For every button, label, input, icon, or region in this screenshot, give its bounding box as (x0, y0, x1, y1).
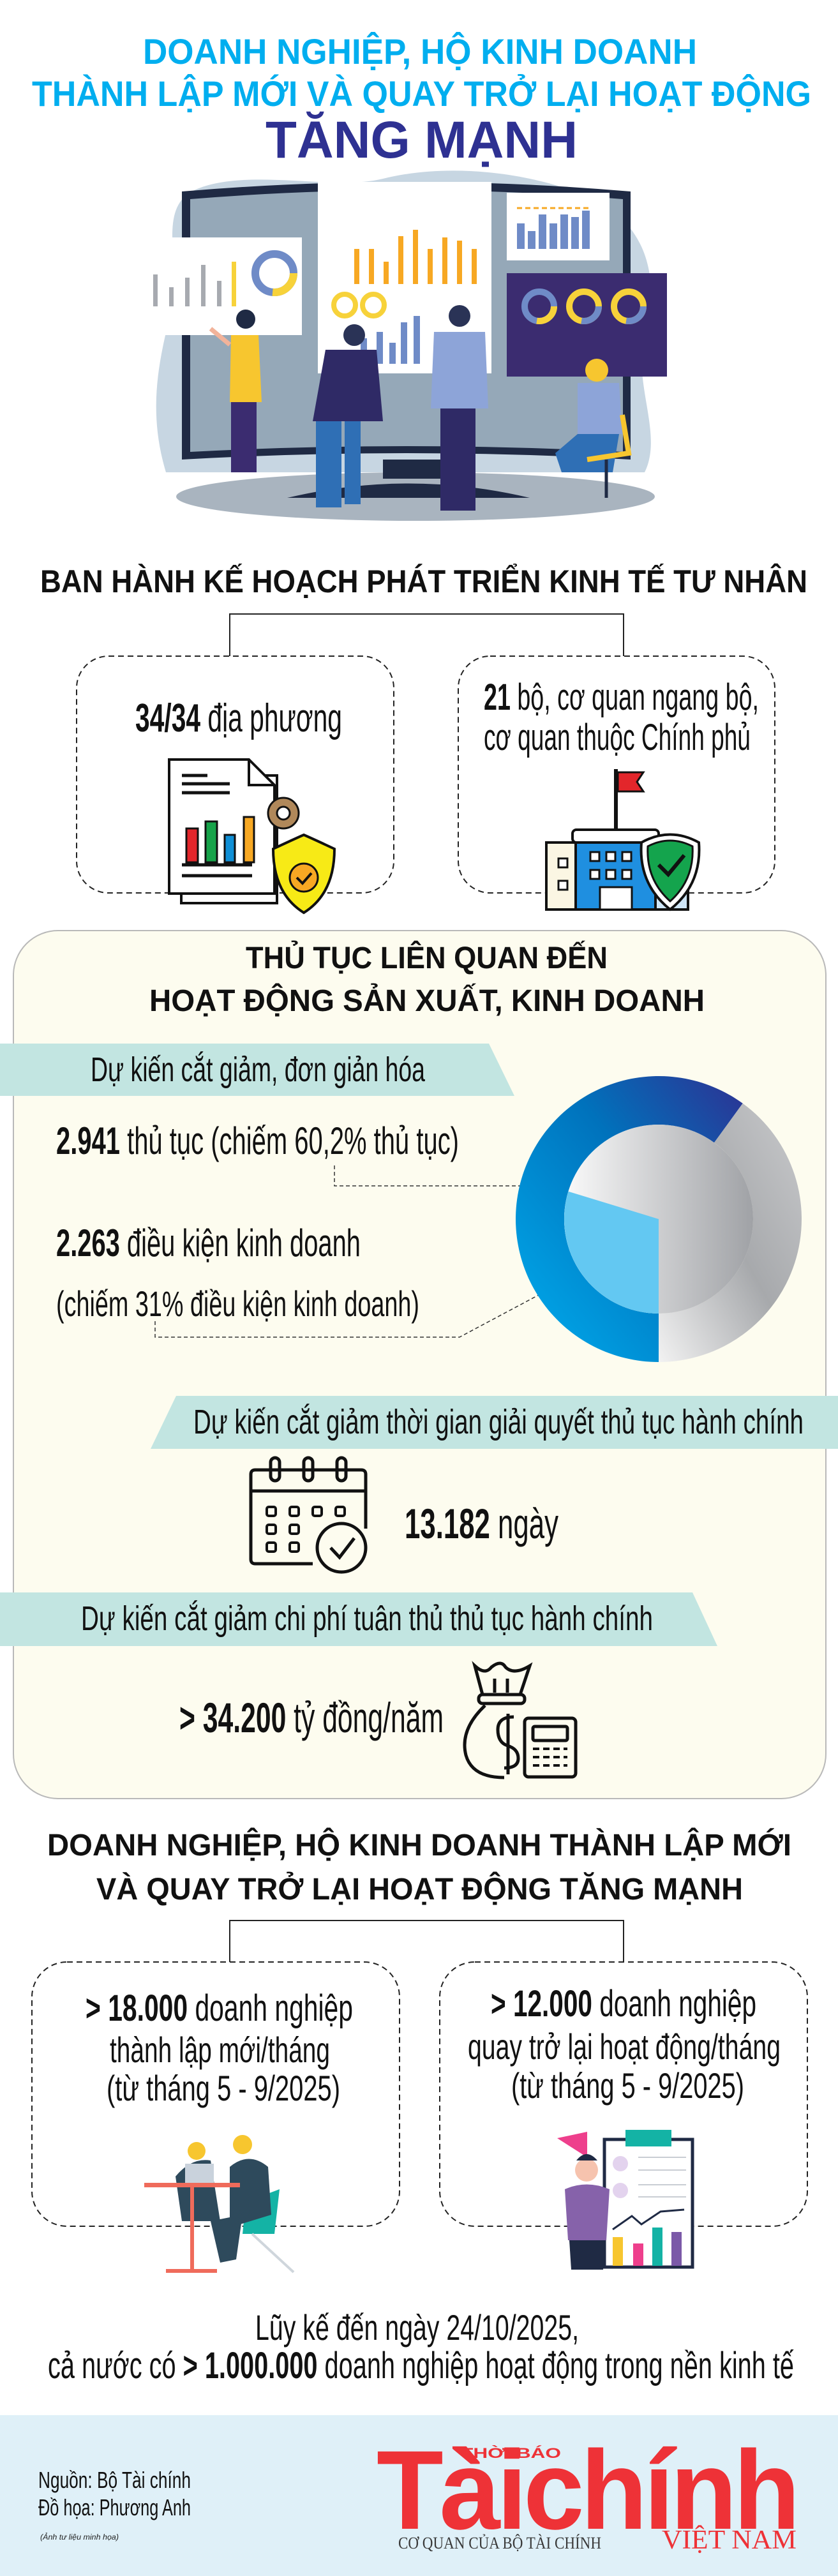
icon: man with clipboard chart (557, 2130, 692, 2270)
stat: 2.941 thủ tục: 2.941 thủ tục (chiếm 60,2% thủ tục) (56, 1120, 459, 1162)
section heading: doanh nghiệp thành lập mới: VÀ QUAY TRỞ LẠI HOẠT ĐỘNG TĂNG MẠNH (96, 1871, 743, 1906)
left panel (144, 237, 302, 335)
stat: 34.200 tỷ đồng: > 34.200 tỷ đồng/năm (179, 1694, 444, 1741)
people (211, 310, 262, 472)
icon: government building with shield (546, 769, 699, 910)
center chart panel (318, 182, 491, 373)
title: DOANH NGHIỆP, HỘ KINH DOANH (143, 31, 697, 71)
logo: Thời báo Tài chính Việt Nam: Tàichính (377, 2428, 797, 2553)
arrow: to outer ring (334, 1165, 528, 1186)
top right panel (507, 193, 610, 260)
source credits (38, 2467, 191, 2542)
icon: money bag and calculator (465, 1663, 576, 1778)
stat: 13.182 ngày: 13.182 ngày (405, 1500, 558, 1547)
logo: Thời báo Tài chính Việt Nam: THỜI BÁO (461, 2445, 561, 2461)
icon: calendar (251, 1458, 366, 1572)
donut chart (516, 1076, 802, 1362)
band: chi phí (0, 1592, 717, 1646)
source credits: Đồ họa: Phương Anh (38, 2494, 191, 2520)
footer (0, 2415, 838, 2576)
band: thời gian (151, 1396, 838, 1449)
source credits: (Ảnh tư liệu minh họa) (40, 2532, 119, 2542)
title (32, 31, 811, 169)
panel: 12.000 doanh nghiệp quay trở lại (440, 1962, 807, 2270)
connector bracket 2 (230, 1921, 624, 1962)
connector bracket 1 (230, 614, 624, 656)
summary text: 1.000.000 doanh nghiệp (48, 2307, 794, 2386)
section heading: doanh nghiệp thành lập mới: DOANH NGHIỆP, HỘ KINH DOANH THÀNH LẬP MỚI (47, 1827, 791, 1862)
band: dự kiến cắt giảm đơn giản hóa: Dự kiến cắt giảm, đơn giản hóa (91, 1051, 426, 1089)
panel: 21 bộ, cơ quan (458, 656, 775, 910)
panel: 12.000 doanh nghiệp quay trở lại: (từ tháng 5 - 9/2025) (511, 2065, 744, 2106)
source credits: Nguồn: Bộ Tài chính (38, 2467, 191, 2493)
logo: Thời báo Tài chính Việt Nam: CƠ QUAN CỦA BỘ TÀI CHÍNH (398, 2534, 601, 2552)
navy panel (507, 273, 667, 377)
heading: HOẠT ĐỘNG SẢN XUẤT, KINH DOANH (149, 983, 705, 1018)
logo: Thời báo Tài chính Việt Nam: VIỆT NAM (662, 2525, 797, 2555)
panel: 18.000 doanh nghiệp thành lập mới: (từ tháng 5 - 9/2025) (107, 2068, 340, 2108)
panel: thủ tục liên quan (0, 931, 838, 1799)
panel: 18.000 doanh nghiệp thành lập mới: thành lập mới/tháng (110, 2030, 330, 2070)
panel: 34/34 địa phương (77, 656, 394, 913)
panel: 34/34 địa phương: 34/34 địa phương (135, 696, 342, 740)
stat: 2.263 điều kiện (56, 1222, 419, 1324)
arrow: to inner sector (155, 1269, 587, 1337)
panel: 18.000 doanh nghiệp thành lập mới: > 18.000 doanh nghiệp (86, 1988, 353, 2029)
panel: 12.000 doanh nghiệp quay trở lại: > 12.000 doanh nghiệp (491, 1983, 756, 2025)
heading (149, 940, 705, 1018)
icon: document with chart, gear and shield (169, 760, 334, 913)
stat: 2.263 điều kiện: 2.263 điều kiện kinh doanh (56, 1222, 361, 1264)
section heading: doanh nghiệp thành lập mới (47, 1827, 791, 1906)
title: TĂNG MẠNH (266, 111, 578, 169)
stat: 2.263 điều kiện: (chiếm 31% điều kiện kinh doanh) (56, 1284, 419, 1324)
summary text: 1.000.000 doanh nghiệp: Lũy kế đến ngày 24/10/2025, (255, 2307, 579, 2348)
band: dự kiến cắt giảm đơn giản hóa (0, 1044, 514, 1096)
icon: two businessmen at table (144, 2135, 294, 2272)
heading: THỦ TỤC LIÊN QUAN ĐẾN (246, 940, 608, 975)
hero illustration: team analysing charts (144, 170, 667, 521)
panel: 18.000 doanh nghiệp thành lập mới (32, 1962, 400, 2272)
